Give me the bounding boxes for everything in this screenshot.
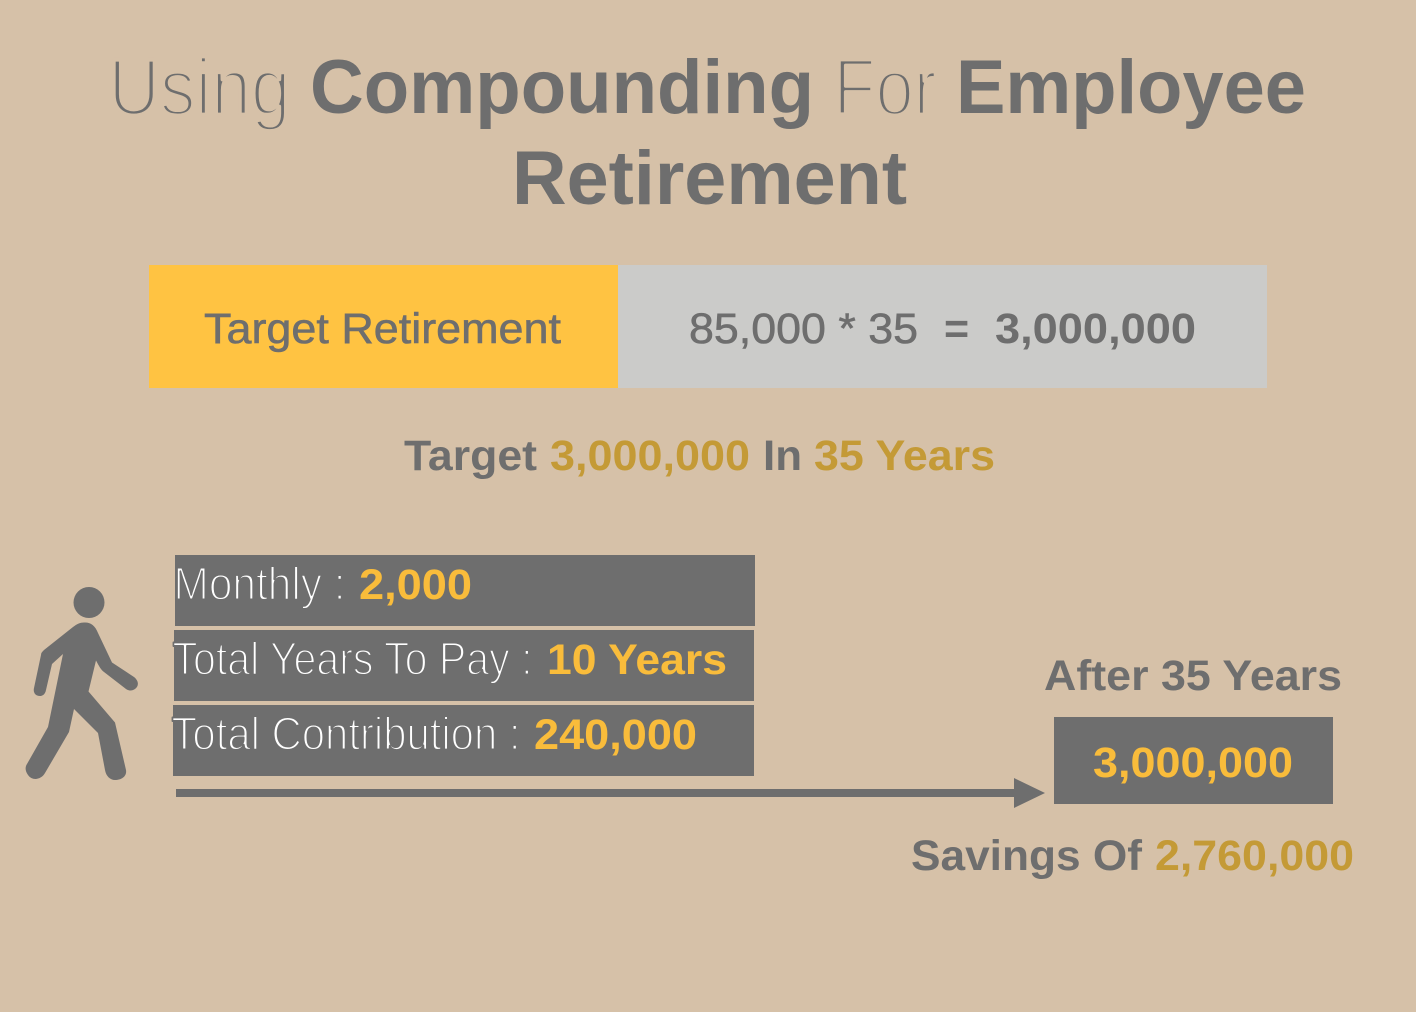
panel: total years to pay: 10 Years	[547, 636, 727, 684]
savings callout: Savings Of	[911, 832, 1143, 880]
panel: monthly	[174, 555, 755, 626]
title: For	[834, 42, 936, 132]
panel: total contribution: Total Contribution :	[172, 708, 520, 760]
result box: 3,000,000	[1093, 739, 1293, 787]
title: Retirement	[512, 136, 907, 221]
formula cell	[618, 265, 1267, 388]
title: Compounding	[310, 45, 814, 130]
title: Using	[108, 42, 290, 132]
icon: walking person	[26, 587, 138, 780]
result box	[1054, 717, 1333, 804]
target subheading: 35 Years	[814, 432, 995, 480]
panel: total years to pay: Total Years To Pay :	[172, 633, 532, 685]
target label cell	[149, 265, 618, 388]
target subheading: Target	[404, 432, 537, 480]
target subheading: In	[763, 432, 802, 480]
panel: monthly: Monthly :	[174, 558, 346, 610]
panel: target retirement bar	[149, 265, 1267, 388]
formula cell: 3,000,000	[995, 305, 1196, 353]
panel: total years to pay	[172, 630, 754, 701]
panel: total contribution: 240,000	[534, 711, 697, 759]
arrow	[176, 778, 1045, 808]
target label cell: Target Retirement	[204, 305, 561, 353]
panel: monthly: 2,000	[359, 561, 472, 609]
target subheading	[404, 432, 995, 480]
savings callout	[911, 832, 1354, 880]
after 35 years label: After 35 Years	[1044, 652, 1342, 700]
formula cell: =	[944, 305, 969, 353]
title: Employee	[956, 45, 1306, 130]
formula cell: 85,000 * 35	[689, 305, 918, 353]
panel: total contribution	[172, 705, 754, 776]
title	[108, 42, 1306, 221]
savings callout: 2,760,000	[1155, 832, 1354, 880]
target subheading: 3,000,000	[550, 432, 750, 480]
